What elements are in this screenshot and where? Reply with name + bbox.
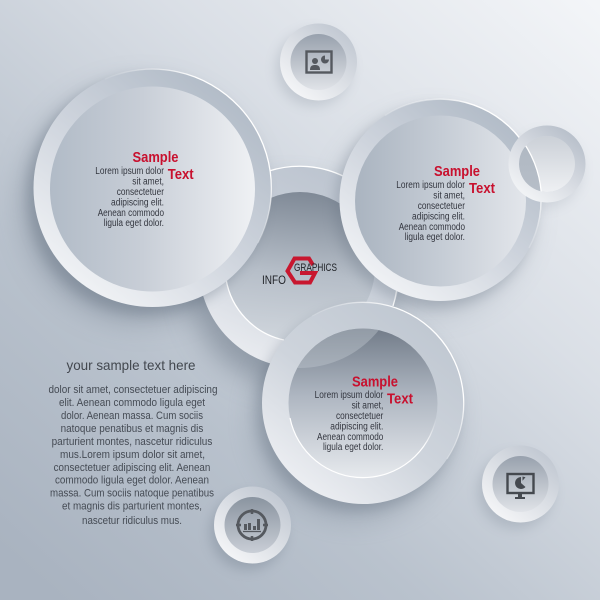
text block: left paragraph: nascetur ridiculus mus. xyxy=(82,515,182,527)
text block: left paragraph: et magnis dis parturient montes, xyxy=(62,500,202,512)
logo xyxy=(262,258,337,287)
text block: left paragraph: natoque penatibus et magnis dis xyxy=(61,423,204,435)
ring: overlapping right lens xyxy=(508,126,586,202)
panel: bottom circle xyxy=(262,302,464,504)
heading: Sample xyxy=(352,375,398,391)
text block: Aenean commodo xyxy=(317,432,384,443)
heading: Sample xyxy=(132,150,178,166)
text block: ligula eget dolor. xyxy=(104,218,164,229)
heading: Text xyxy=(387,392,413,408)
subheading: your sample text here xyxy=(66,357,196,373)
text block: left paragraph xyxy=(48,384,218,527)
text block: adipiscing elit. xyxy=(330,421,383,432)
text block: adipiscing elit. xyxy=(111,197,164,208)
icon badge: monitor xyxy=(482,446,559,522)
heading xyxy=(434,164,495,197)
text block: ligula eget dolor. xyxy=(405,232,465,243)
text block xyxy=(315,390,384,453)
icon: presentation board xyxy=(306,52,332,72)
shadow of bottom circle xyxy=(256,309,458,511)
text block: Aenean commodo xyxy=(98,208,164,219)
panel: center circle xyxy=(199,166,401,368)
text block: Lorem ipsum dolor xyxy=(396,180,466,191)
text block: left paragraph: mus.Lorem ipsum dolor sit amet, xyxy=(60,449,205,461)
heading: Sample xyxy=(434,164,480,180)
text block: left paragraph: elit. Aenean commodo ligula eget xyxy=(59,397,205,409)
text block: left paragraph: parturient montes, nascetur ridiculus xyxy=(52,436,213,448)
heading: Text xyxy=(168,167,194,183)
heading xyxy=(132,150,194,183)
logo mark xyxy=(288,258,315,282)
panel: left circle xyxy=(34,69,272,307)
text block: sit amet, xyxy=(132,176,164,188)
text block: left paragraph: consectetuer adipiscing elit. Aenean xyxy=(54,462,210,474)
heading xyxy=(352,375,413,408)
text block: Aenean commodo xyxy=(399,222,465,233)
text block: consectetuer xyxy=(336,411,384,422)
text block: sit amet, xyxy=(352,400,383,412)
logo text: info: INFO xyxy=(262,275,286,287)
text block: left paragraph: dolor sit amet, consectetuer adipiscing xyxy=(48,384,218,396)
icon badge: chart target xyxy=(214,486,291,564)
icon: monitor chart xyxy=(508,474,534,499)
text block: adipiscing elit. xyxy=(412,211,465,222)
text block: consectetuer xyxy=(117,187,165,198)
text block: sit amet, xyxy=(433,190,465,202)
text block: left paragraph: dolor. Aenean massa. Cum sociis xyxy=(61,410,203,422)
text block xyxy=(396,180,466,243)
logo text: graphics: GRAPHICS xyxy=(294,262,337,274)
panel: right circle xyxy=(340,99,542,301)
text block: ligula eget dolor. xyxy=(323,442,383,453)
text block: Lorem ipsum dolor xyxy=(315,390,384,401)
text block: consectetuer xyxy=(418,201,466,212)
text block: left paragraph: massa. Cum sociis natoque penatibus xyxy=(50,488,214,500)
icon badge: presentation xyxy=(280,24,357,100)
heading: Text xyxy=(469,181,495,197)
text block: Lorem ipsum dolor xyxy=(95,166,165,177)
text block xyxy=(95,166,165,229)
shadow of left circle xyxy=(27,77,265,315)
text block: left paragraph: commodo ligula eget dolor. Aenean xyxy=(55,474,209,486)
icon: target chart xyxy=(236,509,268,541)
shadow of right circle xyxy=(334,106,536,308)
